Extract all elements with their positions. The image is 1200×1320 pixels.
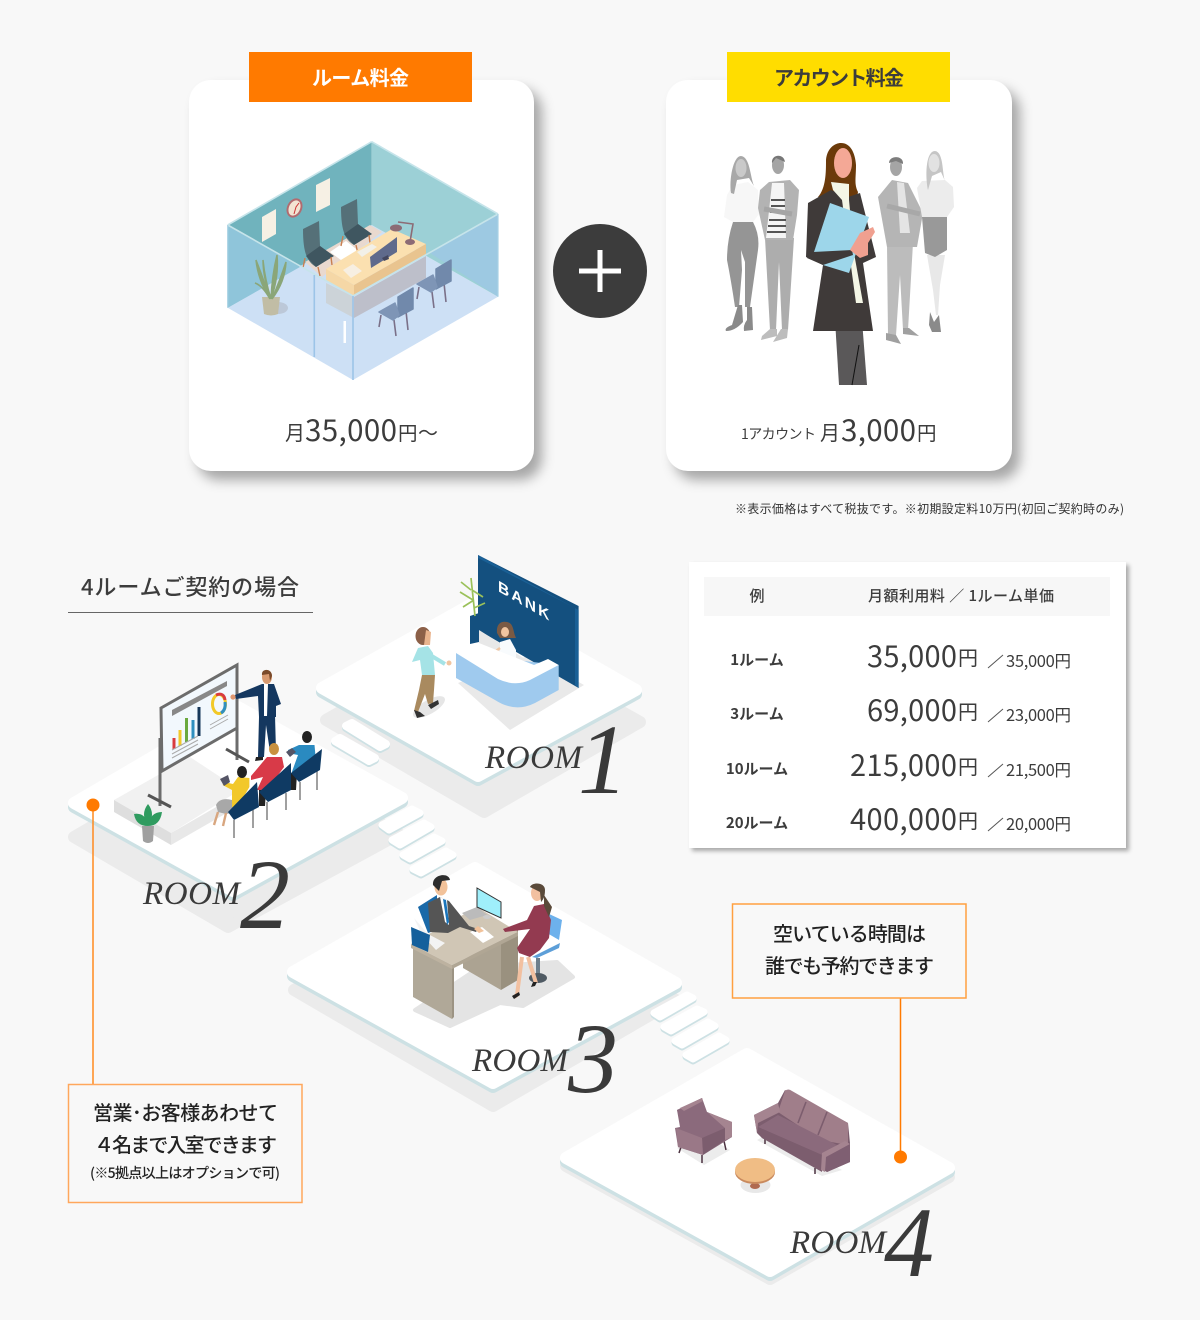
tab: account price heading	[727, 52, 950, 102]
plant	[460, 578, 485, 644]
monitor	[462, 888, 501, 943]
row: 10 rooms: 円	[958, 751, 978, 780]
armchair	[675, 1098, 732, 1165]
customer chair	[529, 913, 562, 983]
person: centre woman	[806, 143, 876, 385]
row: 20 rooms: 20ルーム	[726, 812, 788, 833]
callout: up to four people: (※5拠点以上はオプションで可)	[90, 1163, 280, 1183]
row: 1 room: 1ルーム	[730, 649, 784, 670]
audience	[214, 731, 322, 838]
plant	[255, 255, 288, 316]
person: left woman	[724, 156, 759, 331]
floor: room 4	[566, 1054, 949, 1279]
row: 20 rooms: 20,000円	[1006, 811, 1071, 835]
label: room 4: 4	[884, 1187, 934, 1298]
floor: room 1	[322, 600, 640, 812]
price: room: 〜	[418, 417, 438, 446]
advisor	[411, 875, 484, 952]
steps: room 3 to room 4	[654, 995, 726, 1061]
steps: room 1 to room 2	[335, 723, 386, 763]
scene: presentation	[114, 665, 322, 845]
presenter	[230, 670, 281, 761]
bank sign: BANK	[498, 577, 552, 626]
customer	[503, 884, 552, 999]
icon: plus	[553, 224, 647, 318]
label: room 1: 1	[578, 704, 628, 815]
price: room	[285, 408, 438, 450]
price: room: 月	[285, 417, 305, 446]
plant	[134, 804, 162, 843]
label: room 2: ROOM	[142, 876, 242, 912]
illustration: glass office room	[228, 142, 498, 380]
callout: up to four people	[68, 798, 302, 1202]
panel: account price	[666, 52, 1012, 471]
steps: room 2 to room 3	[382, 809, 453, 875]
row: 20 rooms: 400,000	[850, 797, 957, 839]
label: room 3	[471, 1003, 618, 1114]
callout: up to four people: 営業･お客様あわせて	[93, 1097, 278, 1126]
callout: free rooms bookable: 誰でも予約できます	[765, 950, 934, 979]
row: 1 room: 35,000円	[1006, 648, 1071, 672]
row: 1 room: 35,000	[867, 634, 957, 676]
row: 10 rooms: 10ルーム	[726, 758, 788, 779]
row: 20 rooms: 円	[958, 805, 978, 834]
person: left man	[758, 156, 799, 342]
floor: room 3	[293, 868, 676, 1106]
visitor	[410, 627, 452, 722]
table header: 月額利用料 ／ 1ルーム単価	[868, 585, 1054, 606]
row: 3 rooms: 円	[958, 696, 978, 725]
row: 10 rooms: 215,000	[850, 743, 957, 785]
row: 3 rooms: 3ルーム	[730, 703, 784, 724]
person: right man	[878, 157, 923, 344]
round table	[735, 1158, 775, 1193]
label: room 2	[142, 839, 290, 950]
heading: four rooms: 4ルームご契約の場合	[81, 570, 299, 602]
price: account	[741, 408, 937, 450]
price: account: 1アカウント	[741, 424, 816, 444]
row: 10 rooms	[726, 743, 1071, 785]
note: tax and setup fee: ※表示価格はすべて税抜です。※初期設定料10万円(初回ご契約時のみ)	[735, 500, 1124, 517]
label: room 4	[789, 1187, 934, 1298]
row: 3 rooms	[730, 688, 1071, 730]
panel: room price	[189, 52, 534, 471]
price: account: 月	[820, 417, 840, 446]
counter	[456, 643, 559, 707]
whiteboard	[148, 665, 249, 807]
sofa	[754, 1090, 850, 1176]
label: room 4: ROOM	[789, 1225, 888, 1261]
scene: lounge	[675, 1090, 850, 1193]
label: room 1: ROOM	[484, 740, 584, 776]
row: 3 rooms: 23,000円	[1006, 702, 1071, 726]
label: room 2: 2	[240, 839, 290, 950]
person: right woman	[917, 151, 954, 332]
receptionist	[488, 622, 516, 668]
callout: free rooms bookable: 空いている時間は	[773, 918, 926, 947]
tab: room price heading	[249, 52, 472, 102]
row: 10 rooms: 21,500円	[1006, 757, 1071, 781]
table: monthly fee examples	[689, 562, 1126, 848]
chair pair: blue	[379, 260, 451, 336]
callout: up to four people: ４名まで入室できます	[94, 1129, 277, 1158]
label: room 3: ROOM	[471, 1043, 570, 1079]
row: 1 room: 円	[958, 642, 978, 671]
desk	[326, 222, 426, 318]
row: 1 room	[730, 634, 1071, 676]
scene: meeting desk	[411, 875, 573, 1026]
stage	[114, 757, 240, 845]
table header	[704, 577, 1110, 616]
row: 3 rooms: 69,000	[867, 688, 957, 730]
price: account: 3,000	[841, 408, 916, 450]
illustration: business people	[724, 143, 954, 385]
callout: free rooms bookable	[732, 904, 966, 1164]
floor: room 2	[74, 707, 402, 927]
table header: 例	[749, 585, 765, 606]
row: 20 rooms	[726, 797, 1071, 839]
price: account: 円	[917, 417, 937, 446]
price: room: 35,000	[305, 408, 397, 450]
desk	[411, 907, 518, 1019]
tab: account price heading: アカウント料金	[774, 62, 904, 91]
label: room 3: 3	[567, 1003, 618, 1114]
chair pair: dark	[303, 199, 372, 276]
label: room 1	[484, 704, 628, 815]
scene: bank reception	[410, 555, 584, 730]
tab: room price heading: ルーム料金	[312, 62, 409, 91]
price: room: 円	[398, 417, 418, 446]
